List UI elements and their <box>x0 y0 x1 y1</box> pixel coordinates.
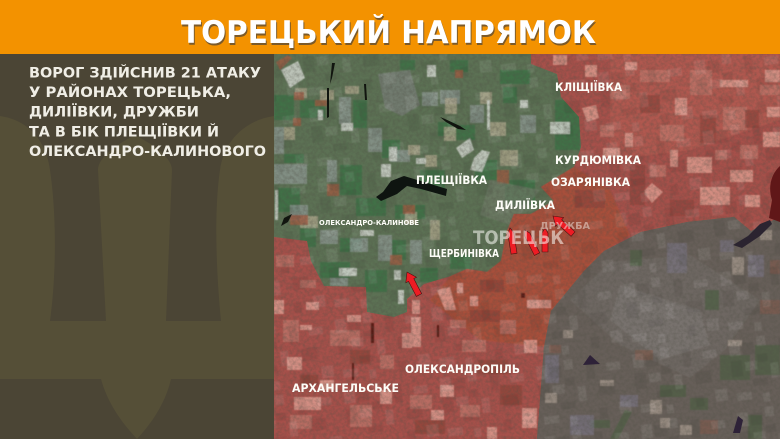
text block: attack summary: ДИЛІЇВКИ, ДРУЖБИ <box>29 104 199 120</box>
icon: dark red reservoir <box>769 166 780 222</box>
labels: settlement names: ДИЛІЇВКА <box>495 197 555 212</box>
labels: settlement names: АРХАНГЕЛЬСЬКЕ <box>292 381 399 395</box>
area: small town north of Pleshchiivka <box>378 70 420 116</box>
text block: attack summary: ТА В БІК ПЛЕЩІЇВКИ Й <box>29 124 219 140</box>
text block: attack summary <box>29 64 266 160</box>
header: orange title bar <box>0 0 780 54</box>
text block: attack summary: ОЛЕКСАНДРО-КАЛИНОВОГО <box>29 144 266 160</box>
area: grey satellite territory south-east <box>537 217 780 439</box>
labels: settlement names <box>292 79 641 395</box>
arrow: towards Druzhba <box>552 216 576 237</box>
labels: settlement names: ОЛЕКСАНДРОПІЛЬ <box>405 362 520 376</box>
area: red occupied territory <box>274 54 780 439</box>
labels: settlement names: ПЛЕЩІЇВКА <box>416 172 487 187</box>
icon: black reservoir by Pleshchiivka <box>376 176 447 201</box>
lower red fields <box>274 283 551 439</box>
labels: settlement names: ДРУЖБА <box>540 221 590 232</box>
title: ТОРЕЦЬКИЙ НАПРЯМОК <box>182 15 597 53</box>
labels: settlement names: ЩЕРБИНІВКА <box>429 248 500 260</box>
icons: dark ravines <box>281 63 466 226</box>
icons: dark lakes <box>583 220 772 433</box>
labels: settlement names: КЛІЩІЇВКА <box>555 79 622 94</box>
arrow: Toretsk west <box>507 228 517 254</box>
decorative trident emblem <box>0 116 274 439</box>
texture: field mosaic <box>274 54 780 439</box>
labels: settlement names: ОЗАРЯНІВКА <box>551 175 630 189</box>
text block: attack summary: У РАЙОНАХ ТОРЕЦЬКА, <box>29 84 231 101</box>
labels: settlement names: ТОРЕЦЬК <box>473 227 564 249</box>
labels: settlement names: ОЛЕКСАНДРО-КАЛИНОВЕ <box>319 219 419 227</box>
map: satellite frontline map <box>274 54 780 439</box>
labels: settlement names: КУРДЮМІВКА <box>555 153 641 167</box>
panel: left text panel <box>0 54 274 439</box>
area: green controlled territory fields <box>274 55 580 304</box>
arrow: Toretsk east <box>542 228 548 252</box>
text block: attack summary: ВОРОГ ЗДІЙСНИВ 21 АТАКУ <box>29 64 261 82</box>
arrow: Toretsk centre <box>522 229 540 256</box>
arrow: attack towards Shcherbynivka <box>406 272 422 297</box>
title: ТОРЕЦЬКИЙ НАПРЯМОК <box>181 13 596 51</box>
